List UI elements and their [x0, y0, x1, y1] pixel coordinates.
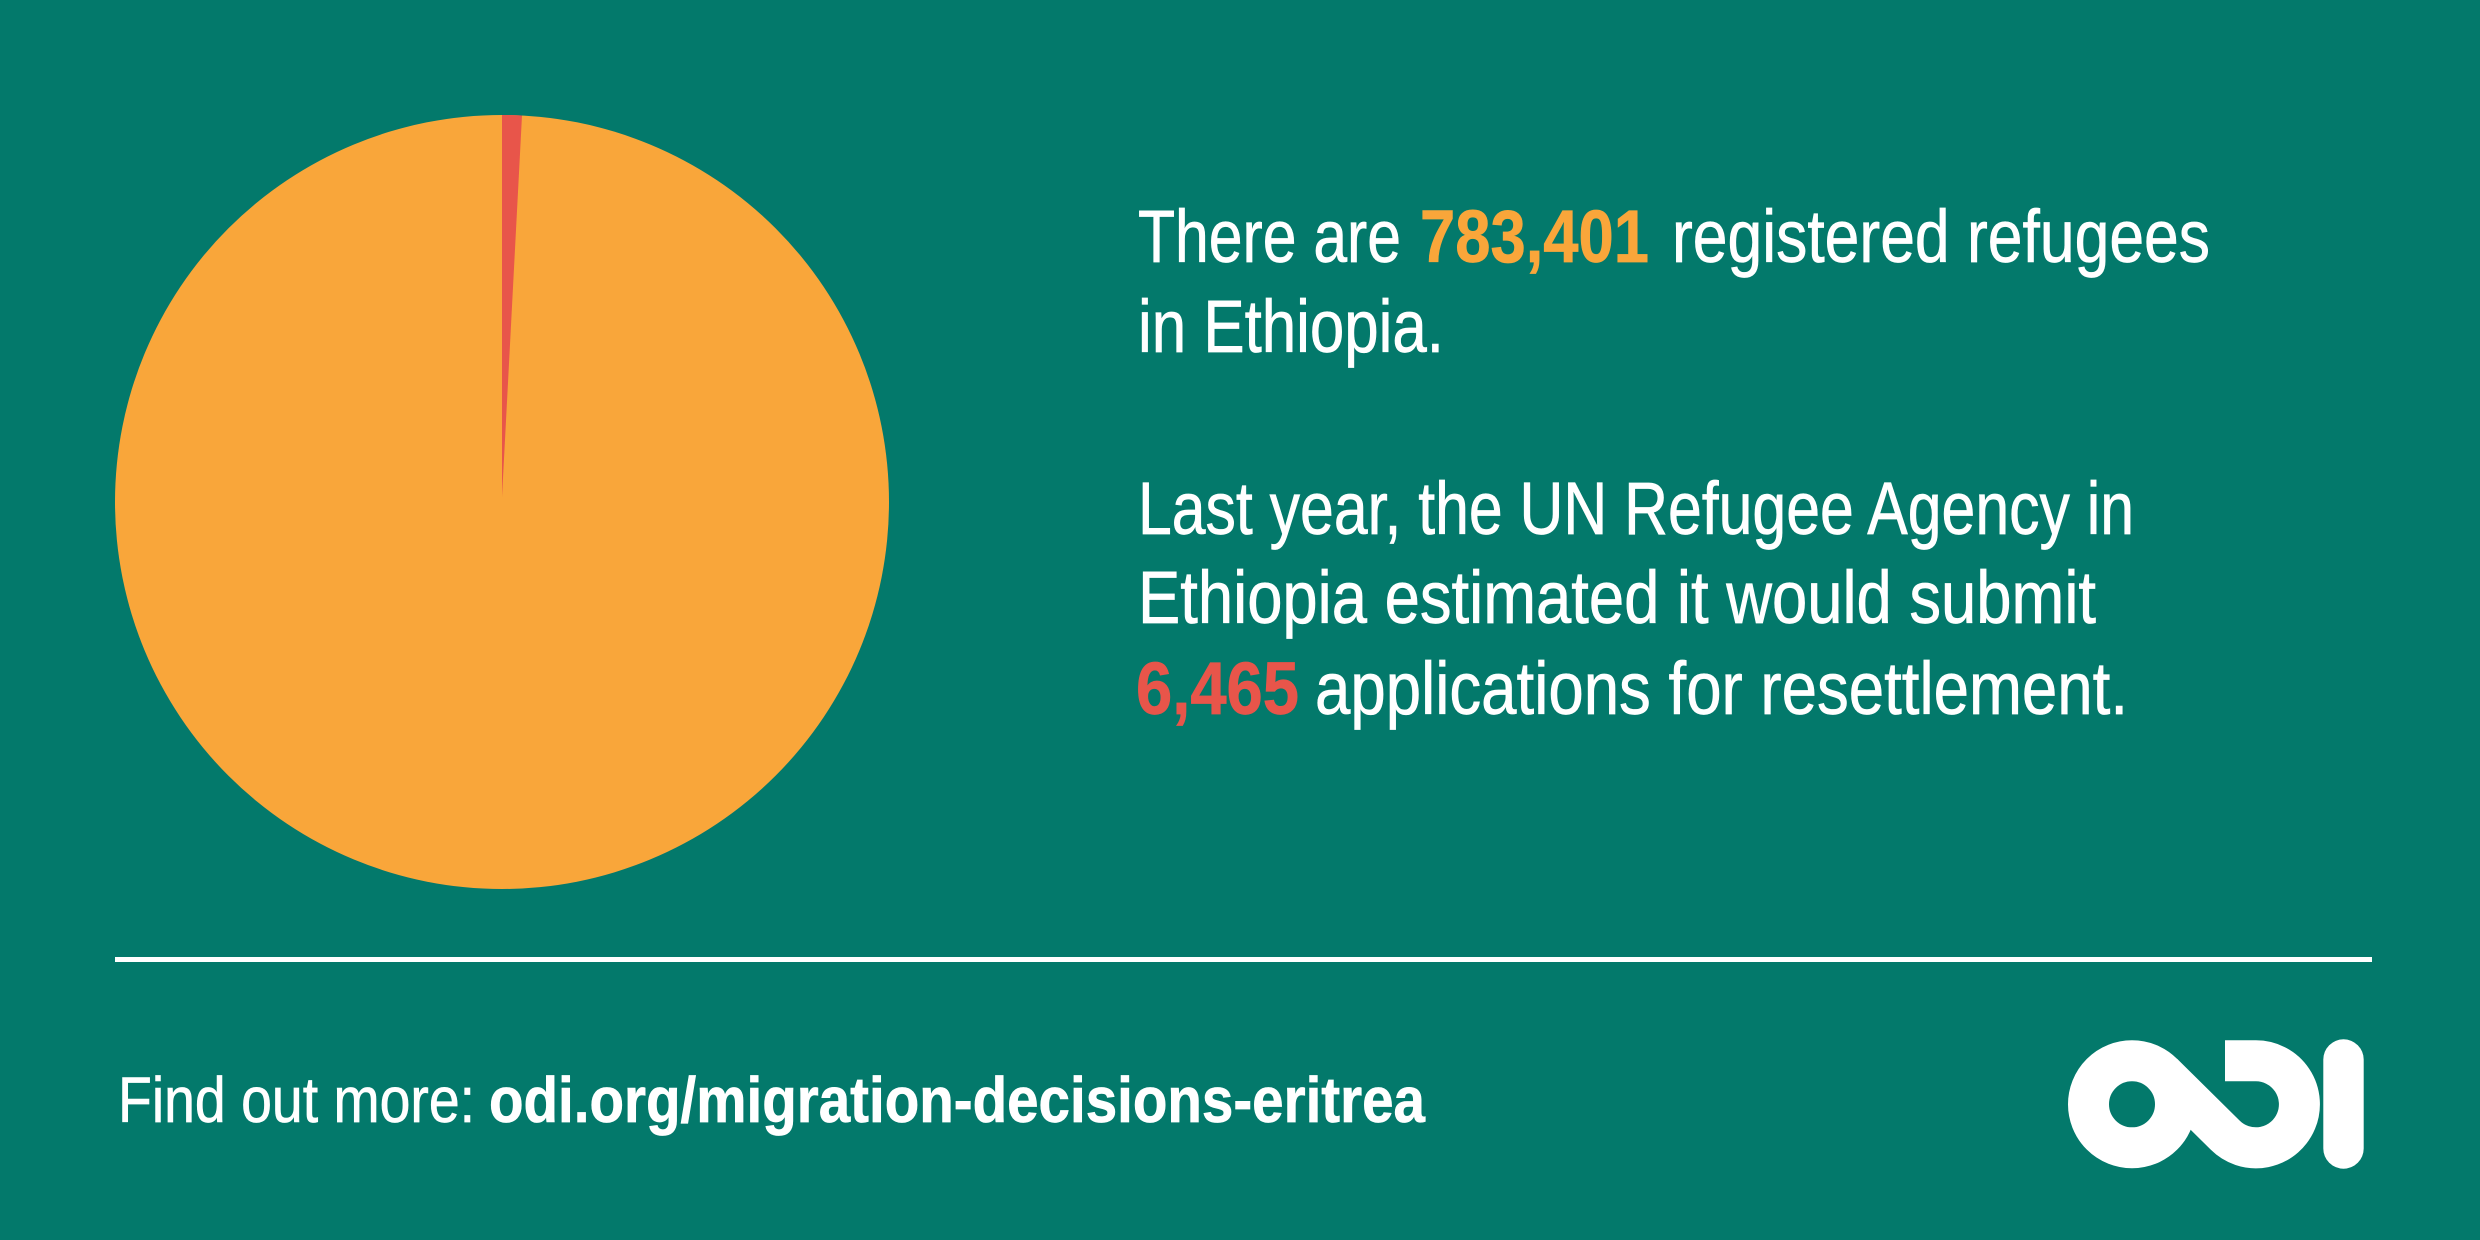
text block: registered refugees: There are — [1138, 195, 1401, 278]
pie slice: 6,465 resettlement applications — [502, 115, 522, 497]
text block: registered refugees — [1138, 195, 2210, 368]
figure: 783,401: 783,401 — [1420, 195, 1649, 278]
text block: resettlement applications — [1136, 467, 2134, 730]
footer link text — [118, 1064, 1425, 1136]
logo: ODI — [2088, 1039, 2364, 1169]
divider line — [115, 957, 2372, 962]
text block: resettlement applications: applications for resettlement. — [1315, 647, 2128, 730]
text block: resettlement applications: Last year, the UN Refugee Agency in — [1138, 467, 2134, 550]
footer link text: Find out more: — [118, 1064, 475, 1136]
text block: registered refugees: registered refugees — [1672, 195, 2210, 278]
text block: registered refugees: in Ethiopia. — [1138, 285, 1444, 368]
footer link text: odi.org/migration-decisions-eritrea — [489, 1064, 1425, 1136]
pie slice: 783,401 registered refugees — [115, 115, 889, 889]
pie chart: refugees vs resettlement applications — [115, 115, 889, 889]
text block: resettlement applications: Ethiopia estimated it would submit — [1138, 556, 2096, 639]
figure: 6,465: 6,465 — [1136, 647, 1299, 730]
